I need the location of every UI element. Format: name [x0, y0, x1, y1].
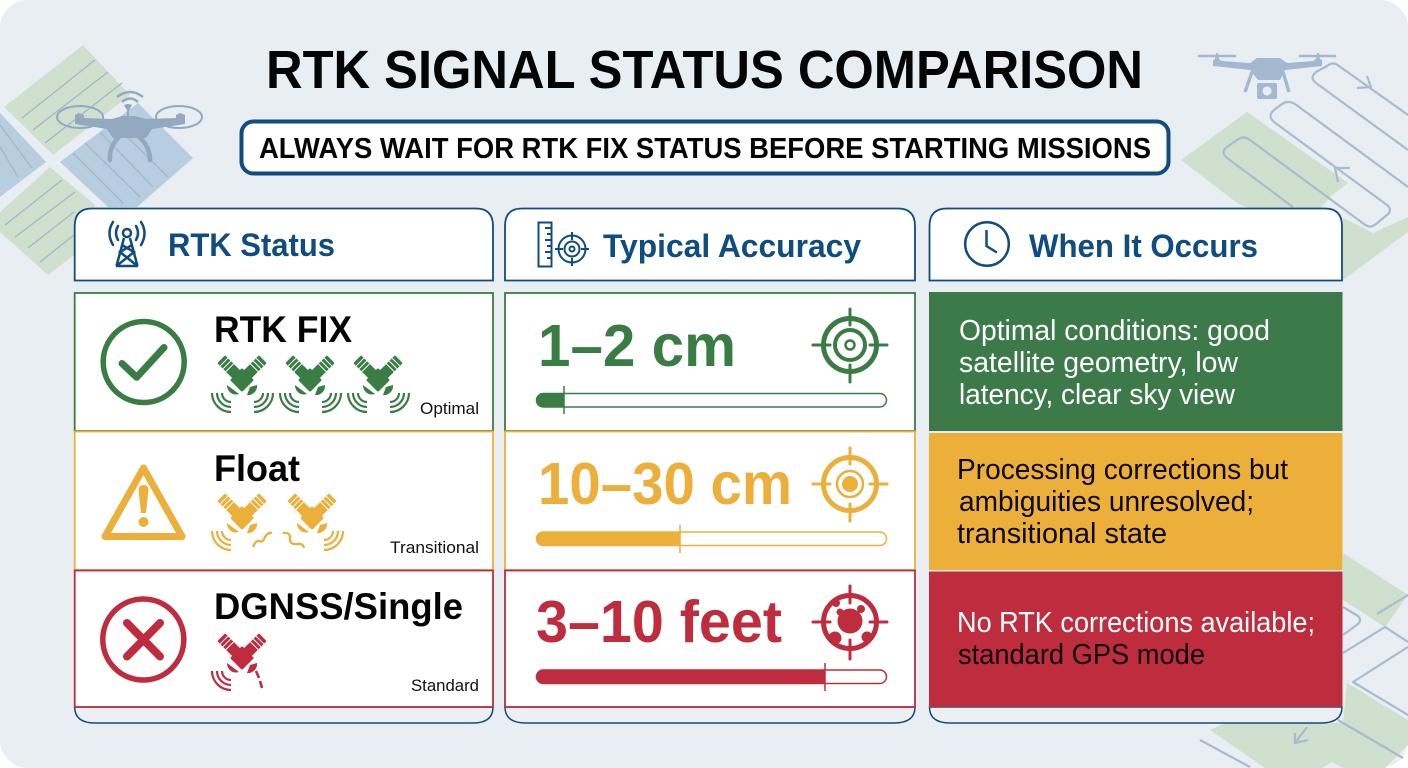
accuracy bar: [536, 525, 886, 553]
drone with wifi, left: [57, 92, 202, 160]
column header: [930, 208, 1342, 280]
row: DGNSS/Single: DGNSS/Single: [214, 586, 463, 627]
row: DGNSS/Single: Standard: [411, 676, 479, 695]
title: RTK SIGNAL STATUS COMPARISON: [266, 40, 1143, 100]
row: 3-10 feet: [505, 570, 915, 707]
row: processing corrections: Processing corrections but: [957, 454, 1288, 486]
row: no RTK corrections: standard GPS mode: [958, 639, 1205, 671]
row: 3-10 feet: 3–10 feet: [536, 589, 782, 655]
row: RTK FIX: Optimal: [420, 399, 479, 418]
row: 1-2 cm: [505, 293, 915, 431]
icon: warning triangle: [105, 468, 182, 536]
accuracy bar: [536, 663, 886, 691]
icon: scattered target: [813, 586, 887, 659]
background: farm fields left: [0, 45, 193, 275]
column header: [505, 208, 915, 280]
row: no RTK corrections: [929, 572, 1342, 707]
row: Float: [75, 432, 493, 570]
icon: medium target: [813, 448, 887, 521]
column foot: [75, 707, 493, 723]
icon: clock: [965, 222, 1009, 266]
column header: RTK Status: [168, 227, 335, 263]
row: Float: Transitional: [390, 538, 479, 557]
accuracy bar: [536, 386, 886, 414]
icon: three satellites: [212, 355, 409, 412]
row: processing corrections: [929, 433, 1342, 570]
row: 10-30 cm: [505, 432, 915, 570]
row: DGNSS/Single: [75, 570, 493, 707]
row: optimal conditions: Optimal conditions: good: [959, 315, 1270, 347]
row: optimal conditions: [929, 292, 1342, 431]
icon: cross circle: [103, 599, 184, 680]
icon: check circle: [103, 322, 184, 402]
icon: tight target: [813, 309, 887, 382]
row: no RTK corrections: No RTK corrections available;: [957, 607, 1315, 639]
icon: single satellite: [212, 633, 267, 690]
callout: wait for RTK fix: ALWAYS WAIT FOR RTK FIX STATUS BEFORE STARTING MISSIONS: [259, 133, 1151, 165]
background: flight paths and fields right: [1181, 64, 1408, 768]
icon: two satellites with unstable signal: [212, 493, 343, 550]
row: RTK FIX: RTK FIX: [214, 309, 352, 350]
column header: [75, 208, 493, 280]
row: processing corrections: ambiguities unresolved;: [959, 486, 1254, 518]
panel: When It Occurs column: [929, 208, 1342, 723]
column foot: [505, 707, 915, 723]
row: optimal conditions: satellite geometry, low: [959, 347, 1238, 379]
row: Float: Float: [214, 448, 300, 489]
panel: RTK Status column: [75, 208, 493, 723]
icon: ruler and target: [538, 222, 589, 266]
row: processing corrections: transitional state: [957, 518, 1167, 550]
panel: Typical Accuracy column: [505, 208, 915, 723]
column foot: [930, 707, 1342, 723]
row: 10-30 cm: 10–30 cm: [538, 451, 792, 517]
row: optimal conditions: latency, clear sky view: [959, 379, 1235, 411]
row: RTK FIX: [75, 293, 493, 431]
callout: wait for RTK fix: [242, 122, 1168, 174]
row: 1-2 cm: 1–2 cm: [538, 313, 736, 379]
icon: radio tower: [110, 222, 144, 266]
drone with camera, right: [1199, 53, 1335, 99]
column header: When It Occurs: [1029, 228, 1258, 264]
column header: Typical Accuracy: [603, 228, 861, 264]
